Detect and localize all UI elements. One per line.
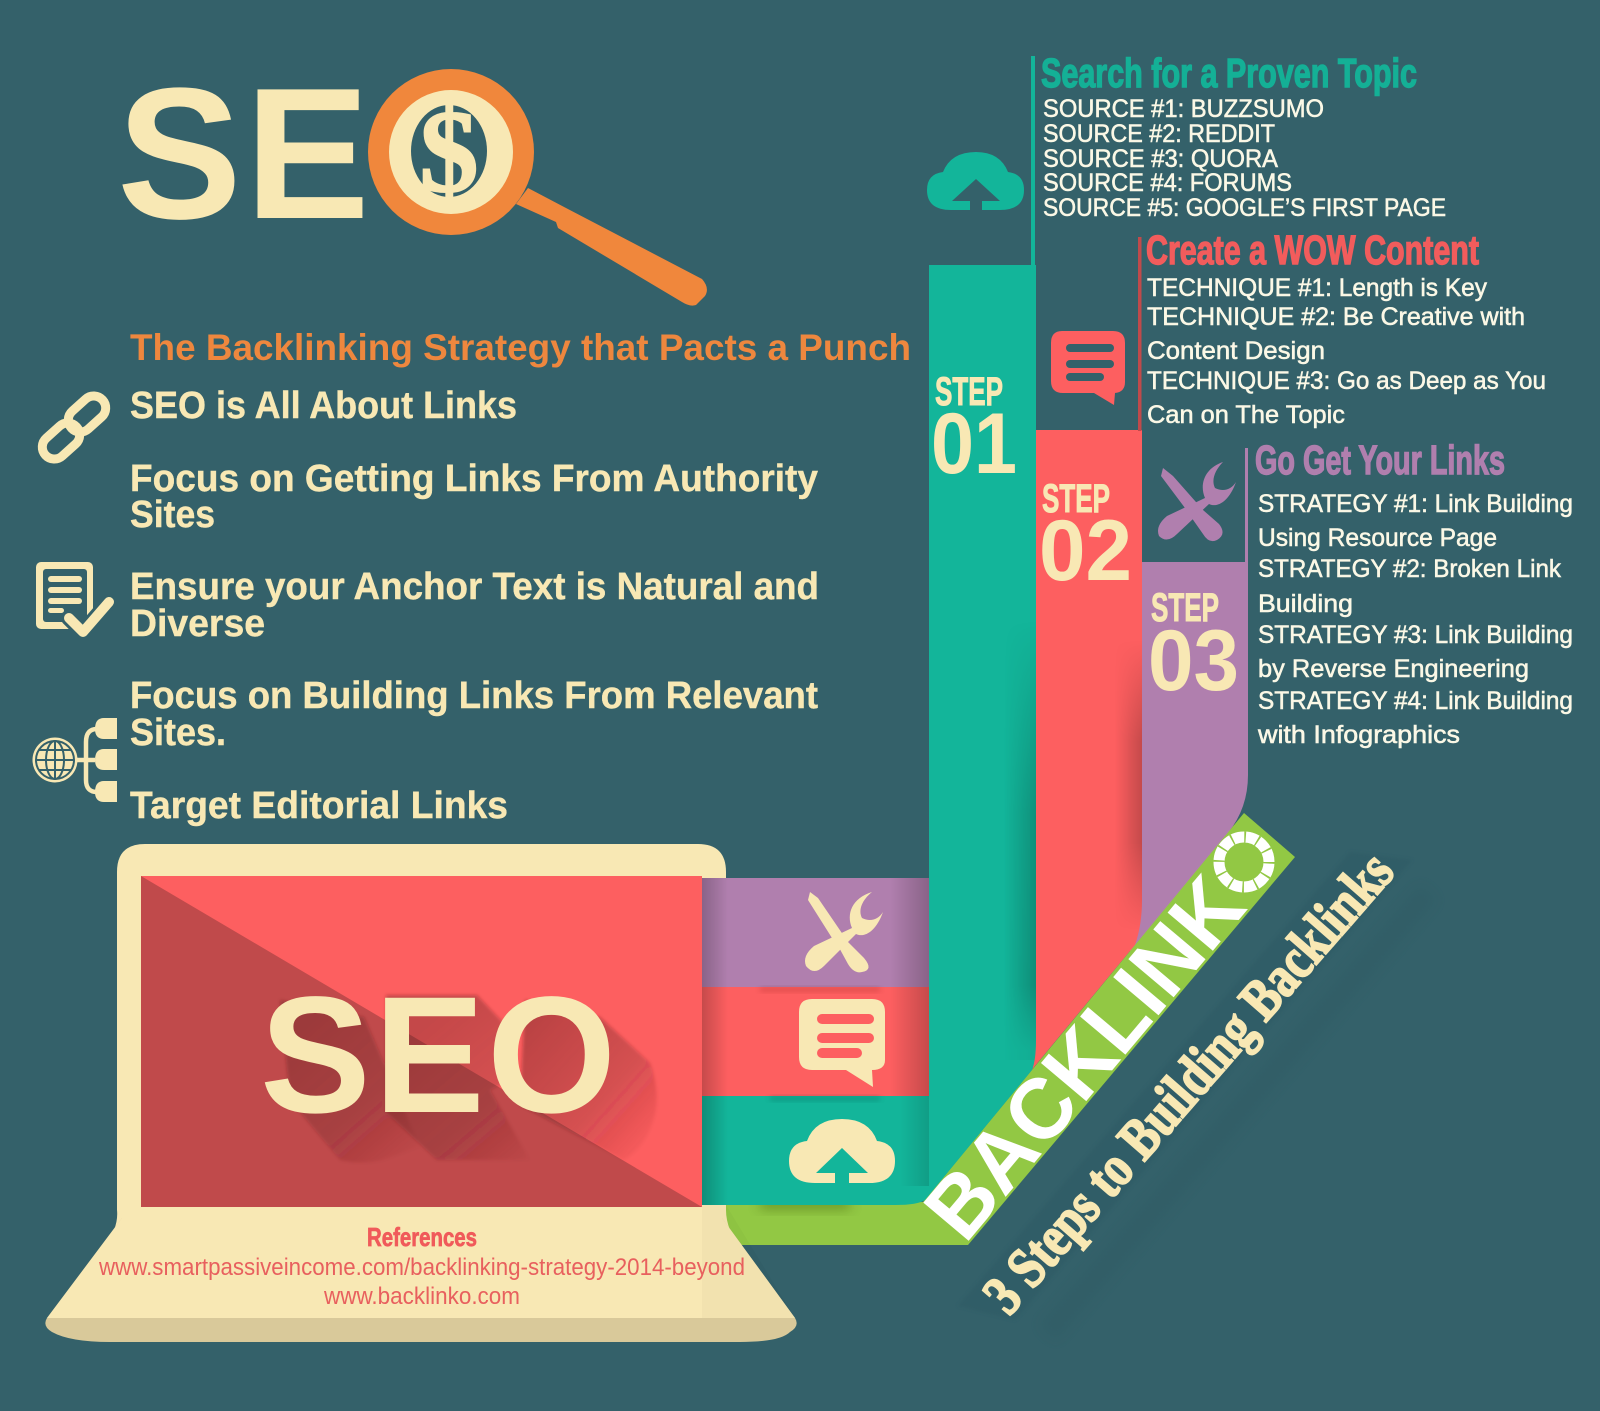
- tip 2: [130, 458, 818, 536]
- panel: step 1 text: [1041, 50, 1446, 222]
- techniques list: TECHNIQUE #2: Be Creative with: [1147, 303, 1525, 331]
- step 02 label and stem: [1039, 237, 1142, 599]
- ribbon: purple step 03 column: [1130, 562, 1248, 960]
- strategies list: with Infographics: [1257, 721, 1460, 749]
- laptop: [45, 844, 797, 1342]
- tip 3: Ensure your Anchor Text is Natural and: [130, 566, 819, 608]
- icon: purple tools: [1158, 462, 1236, 541]
- techniques list: Can on The Topic: [1147, 401, 1345, 429]
- step 02 label and stem: STEP: [1042, 477, 1110, 521]
- strategies list: by Reverse Engineering: [1258, 655, 1529, 683]
- ribbon: red step 02 column: [1030, 430, 1142, 1072]
- strategies list: STRATEGY #1: Link Building: [1258, 490, 1573, 518]
- step 01 label and stem: 01: [931, 396, 1017, 492]
- shadow on green ribbon: [760, 1200, 850, 1208]
- tip 4: Focus on Building Links From Relevant: [130, 675, 818, 717]
- strategies list: STRATEGY #4: Link Building: [1258, 687, 1573, 715]
- green BACKLINKO ribbon: [700, 813, 1295, 1245]
- step 03 label and stem: [1148, 448, 1248, 709]
- band: teal with cloud icon: [702, 1096, 929, 1205]
- icon: chat cream: [799, 999, 885, 1087]
- logo O ring: [1219, 837, 1269, 887]
- column shadow on teal: [1010, 664, 1036, 1049]
- icon: teal cloud: [927, 152, 1024, 210]
- sources list: SOURCE #2: REDDIT: [1043, 120, 1275, 148]
- techniques list: Content Design: [1147, 337, 1325, 365]
- band: red with chat icon: [702, 987, 929, 1096]
- icon: globe network: [32, 718, 117, 802]
- strategies list: STRATEGY #3: Link Building: [1258, 621, 1573, 649]
- tip 4: Sites.: [130, 712, 226, 754]
- tip 1: SEO is All About Links: [130, 385, 517, 427]
- title letters SE: SE: [117, 49, 370, 258]
- heading: step 1: Search for a Proven Topic: [1041, 50, 1417, 96]
- laptop base: [45, 1218, 797, 1342]
- title: SEO with magnifier: [117, 49, 707, 306]
- BACKLINKO wordmark: BACKLINK: [906, 859, 1263, 1257]
- panel: step 3 text: [1255, 437, 1573, 749]
- tip 3: Diverse: [130, 603, 265, 645]
- step 03 label and stem: 03: [1148, 613, 1239, 709]
- references urls: [98, 1254, 745, 1310]
- strategies list: [1257, 490, 1573, 749]
- icon: document with check: [36, 562, 109, 632]
- icon: chain link: [37, 391, 111, 464]
- long shadow of SEO: [280, 995, 657, 1162]
- icon: red chat: [1051, 331, 1125, 405]
- strategies list: Using Resource Page: [1258, 524, 1497, 552]
- techniques list: TECHNIQUE #1: Length is Key: [1147, 274, 1487, 302]
- step 01 label and stem: STEP: [935, 370, 1003, 414]
- references heading: References: [367, 1222, 477, 1252]
- tip 3: [130, 566, 819, 645]
- screen text SEO: SEO: [260, 963, 616, 1148]
- tip 4: [130, 675, 818, 754]
- references urls: www.backlinko.com: [323, 1283, 520, 1310]
- sources list: SOURCE #4: FORUMS: [1043, 169, 1292, 197]
- left list of tips: [130, 385, 819, 827]
- sources list: SOURCE #3: QUORA: [1043, 145, 1278, 173]
- strategies list: STRATEGY #2: Broken Link: [1258, 555, 1561, 583]
- ribbon: teal step 01 column: [702, 265, 1036, 1205]
- laptop screen: [141, 876, 702, 1207]
- step 03 label and stem: STEP: [1151, 586, 1219, 630]
- sources list: SOURCE #1: BUZZSUMO: [1043, 95, 1324, 123]
- tagline: 3 Steps to Building Backlinks: [970, 839, 1406, 1326]
- band: purple with tools icon: [702, 878, 929, 987]
- panel: step 2 text: [1146, 227, 1546, 429]
- techniques list: [1147, 274, 1546, 429]
- subtitle: The Backlinking Strategy that Pacts a Punch: [130, 327, 911, 368]
- shadow band behind tagline: [958, 852, 1436, 1340]
- icon: magnifying glass with dollar: $: [420, 86, 478, 217]
- step 02 label and stem: 02: [1039, 503, 1132, 599]
- icon: cloud cream: [789, 1119, 895, 1183]
- tip 5: Target Editorial Links: [130, 785, 508, 827]
- sources list: [1043, 95, 1446, 222]
- strategies list: Building: [1258, 590, 1353, 618]
- icon: magnifying glass with dollar: [368, 69, 707, 306]
- sources list: SOURCE #5: GOOGLE’S FIRST PAGE: [1043, 194, 1446, 222]
- tip 2: Focus on Getting Links From Authority: [130, 458, 818, 500]
- tip 2: Sites: [130, 494, 215, 536]
- laptop lid: [114, 844, 730, 1230]
- step 01 label and stem: [931, 56, 1035, 492]
- column shadow on red: [1119, 656, 1142, 916]
- references urls: www.smartpassiveincome.com/backlinking-strategy-2014-beyond: [98, 1254, 745, 1281]
- icon: tools cream: [805, 892, 883, 972]
- heading: step 2: Create a WOW Content: [1146, 227, 1479, 273]
- techniques list: TECHNIQUE #3: Go as Deep as You: [1147, 367, 1546, 395]
